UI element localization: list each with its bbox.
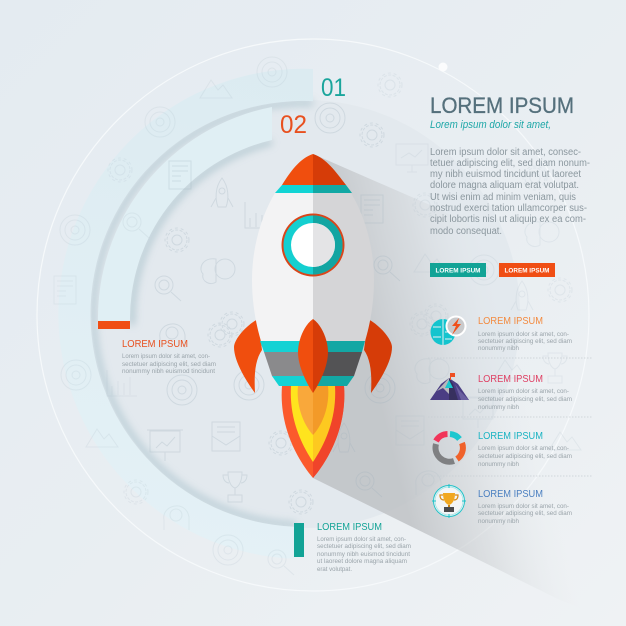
left text block: nonummy nibh euismod tincidunt [122, 368, 215, 375]
bottom text block [317, 521, 411, 573]
bottom text block: ut laoreet dolore magna aliquam [317, 558, 407, 565]
list item 2 [430, 373, 572, 411]
list item 1: Lorem ipsum dolor sit amet, con- [478, 331, 569, 338]
left text block: LOREM IPSUM [122, 338, 188, 350]
list item 2: nonummy nibh [478, 404, 519, 411]
ring 01 [58, 69, 313, 559]
engine bands [260, 341, 365, 386]
center fin [298, 319, 328, 393]
bottom text block: sectetuer adipiscing elit, sed diam [317, 543, 411, 550]
list item 3: nonummy nibh [478, 461, 519, 468]
ring 02 [98, 107, 272, 325]
list item 1 [430, 315, 572, 352]
icon: trophy target [432, 484, 466, 518]
intro paragraph: cipit lobortis nisl ut aliquip ex ea com- [430, 214, 586, 225]
number 02: 02 [280, 111, 307, 139]
side fins [234, 319, 392, 393]
subtitle: Lorem ipsum dolor sit amet, [430, 119, 551, 131]
button red [499, 263, 555, 277]
left text block: sectetuer adipiscing elit, sed diam [122, 361, 216, 368]
intro paragraph [430, 147, 590, 237]
bottom text block: erat volutpat. [317, 566, 352, 573]
number 01: 01 [321, 74, 346, 102]
list item 4 [432, 484, 572, 525]
window [282, 214, 344, 276]
inner disk [92, 100, 520, 528]
bottom text block: LOREM IPSUM [317, 521, 382, 533]
body [252, 193, 374, 341]
outer thin circle with dot [37, 39, 589, 591]
list item 1: sectetuer adipiscing elit, sed diam [478, 338, 572, 345]
bottom text block: Lorem ipsum dolor sit amet, con- [317, 536, 406, 543]
background icon pattern on disk [147, 103, 400, 514]
list item 4: LOREM IPSUM [478, 488, 543, 500]
intro paragraph: modo consequat. [430, 226, 502, 237]
marker bar teal [294, 523, 304, 557]
list item 3: Lorem ipsum dolor sit amet, con- [478, 445, 569, 452]
intro paragraph: Lorem ipsum dolor sit amet, consec- [430, 147, 581, 158]
list item 2: Lorem ipsum dolor sit amet, con- [478, 388, 569, 395]
intro paragraph: nostrud exerci tation ullamcorper sus- [430, 203, 587, 214]
icon: donut chart [435, 434, 463, 462]
intro paragraph: tetuer adipiscing elit, sed diam nonum- [430, 158, 590, 169]
list item 1: nonummy nibh [478, 345, 519, 352]
title: LOREM IPSUM [430, 93, 574, 118]
icon: brain with bolt [430, 316, 466, 345]
left text block [122, 338, 216, 375]
intro paragraph: dolore magna aliquam erat volutpat. [430, 180, 579, 191]
list item 3: sectetuer adipiscing elit, sed diam [478, 453, 572, 460]
intro paragraph: Ut wisi enim ad minim veniam, quis [430, 192, 576, 203]
button teal: LOREM IPSUM [436, 268, 480, 274]
icon: mountain with flag [430, 373, 469, 400]
list item 2: LOREM IPSUM [478, 373, 543, 385]
bottom text block: nonummy nibh euismod tincidunt [317, 551, 410, 558]
list item 3: LOREM IPSUM [478, 430, 543, 442]
marker bar red [98, 321, 130, 329]
long shadow of rocket [313, 154, 626, 626]
list item 2: sectetuer adipiscing elit, sed diam [478, 396, 572, 403]
nose cone [275, 154, 352, 193]
list item 1: LOREM IPSUM [478, 315, 543, 327]
left text block: Lorem ipsum dolor sit amet, con- [122, 353, 210, 360]
intro paragraph: my nibh euismod tincidunt ut laoreet [430, 169, 581, 180]
button red: LOREM IPSUM [504, 268, 550, 274]
list item 4: sectetuer adipiscing elit, sed diam [478, 510, 572, 517]
list item 4: nonummy nibh [478, 518, 519, 525]
list item 4: Lorem ipsum dolor sit amet, con- [478, 503, 569, 510]
rocket [234, 154, 392, 478]
faint icon pattern on rings and right side [54, 57, 581, 575]
flame [282, 386, 344, 478]
list item 3 [435, 430, 572, 468]
button teal [430, 263, 486, 277]
